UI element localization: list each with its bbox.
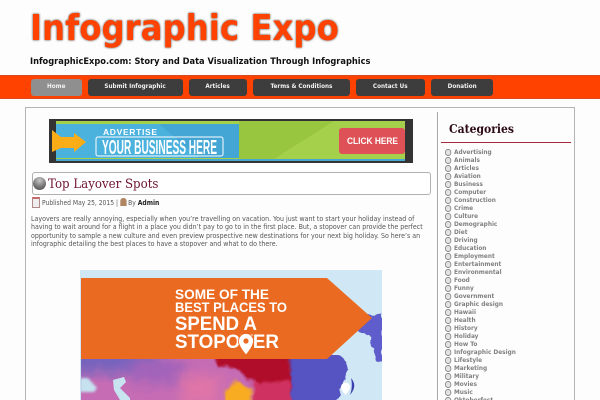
post title box	[32, 172, 431, 195]
orange ribbon title	[81, 278, 372, 359]
categories list: Aviation	[454, 172, 481, 180]
orange ribbon title: BEST PLACES TO	[175, 299, 287, 315]
infographic image	[80, 270, 382, 400]
article intro paragraph: Layovers are really annoying, especially when you’re travelling on vacation. You just want to start your holiday instead of	[31, 215, 414, 223]
icon: grey ball	[33, 177, 46, 190]
categories list: Computer	[454, 188, 486, 196]
categories list: Crime	[454, 204, 473, 212]
nav: Submit Infographic	[88, 79, 183, 96]
categories heading: Categories	[449, 122, 514, 136]
tagline: InfographicExpo.com: Story and Data Visualization Through Infographics	[30, 56, 370, 67]
orange ribbon title: SPEND A	[175, 313, 257, 335]
orange ribbon title: STOPOVER	[175, 331, 279, 353]
categories list: Construction	[454, 196, 496, 204]
categories list: Health	[454, 316, 476, 324]
nav: Donation	[431, 79, 493, 96]
categories list: Diet	[454, 228, 468, 236]
categories list: Environmental	[454, 268, 502, 276]
sidebar divider	[437, 112, 438, 400]
categories list: Animals	[454, 156, 480, 164]
article intro paragraph	[31, 215, 423, 248]
site title: Infographic Expo	[30, 8, 339, 49]
categories list: Military	[454, 372, 479, 380]
nav: Terms & Conditions: Terms & Conditions	[271, 83, 332, 90]
post meta	[32, 197, 159, 208]
categories list: Music	[454, 388, 473, 396]
categories list: Advertising	[454, 148, 492, 156]
advertisement banner: CLICK HERE	[347, 135, 398, 146]
categories list: Demographic	[454, 220, 497, 228]
advertisement banner	[49, 119, 413, 163]
orange ribbon title: SOME OF THE	[175, 286, 269, 302]
categories list: Culture	[454, 212, 478, 220]
nav: Terms & Conditions	[253, 79, 350, 96]
article intro paragraph: having to wait around for a flight in a place you didn’t pay to go to in the first place. But, a stopover can provide the perfect	[31, 223, 423, 231]
map pin	[341, 378, 354, 395]
meta text: Published May 25, 2015 | By Admin	[42, 199, 159, 207]
nav: Donation: Donation	[447, 83, 477, 90]
categories list: Graphic design	[454, 300, 503, 308]
categories list: Government	[454, 292, 494, 300]
article intro paragraph: opportunity to sample a new culture and even preview prospective new destinations for your next big holiday. So here’s an	[31, 232, 420, 240]
categories list: How To	[454, 340, 477, 348]
categories list: Lifestyle	[454, 356, 482, 364]
categories list: Entertainment	[454, 260, 501, 268]
categories underline	[441, 142, 571, 143]
categories list: Food	[454, 276, 470, 284]
categories list: Hawaii	[454, 308, 476, 316]
nav: Contact Us: Contact Us	[373, 83, 408, 90]
categories list: Marketing	[454, 364, 487, 372]
watercolor map	[65, 314, 382, 400]
nav: Articles: Articles	[206, 83, 230, 90]
categories list: History	[454, 324, 478, 332]
content panel border	[25, 107, 575, 400]
categories list: Business	[454, 180, 483, 188]
article intro paragraph: infographic detailing the best places to have a stopover and what to do there.	[31, 240, 278, 248]
nav: Home	[31, 79, 82, 96]
categories list	[445, 148, 516, 400]
nav: Contact Us	[356, 79, 425, 96]
categories list: Funny	[454, 284, 474, 292]
categories list: Movies	[454, 380, 477, 388]
categories list: Infographic Design	[454, 348, 516, 356]
categories list: Articles	[454, 164, 479, 172]
navigation bar	[0, 75, 600, 99]
nav: Home: Home	[47, 83, 66, 90]
categories list: Driving	[454, 236, 478, 244]
categories list: Holiday	[454, 332, 478, 340]
advertisement banner: YOUR BUSINESS HERE	[102, 137, 217, 159]
nav: Articles	[189, 79, 247, 96]
post title: Top Layover Spots	[48, 176, 158, 192]
categories list: Education	[454, 244, 486, 252]
advertisement banner: ADVERTISE	[103, 127, 157, 137]
icon: calendar	[32, 197, 40, 208]
nav: Submit Infographic: Submit Infographic	[105, 83, 166, 90]
categories list: Employment	[454, 252, 495, 260]
